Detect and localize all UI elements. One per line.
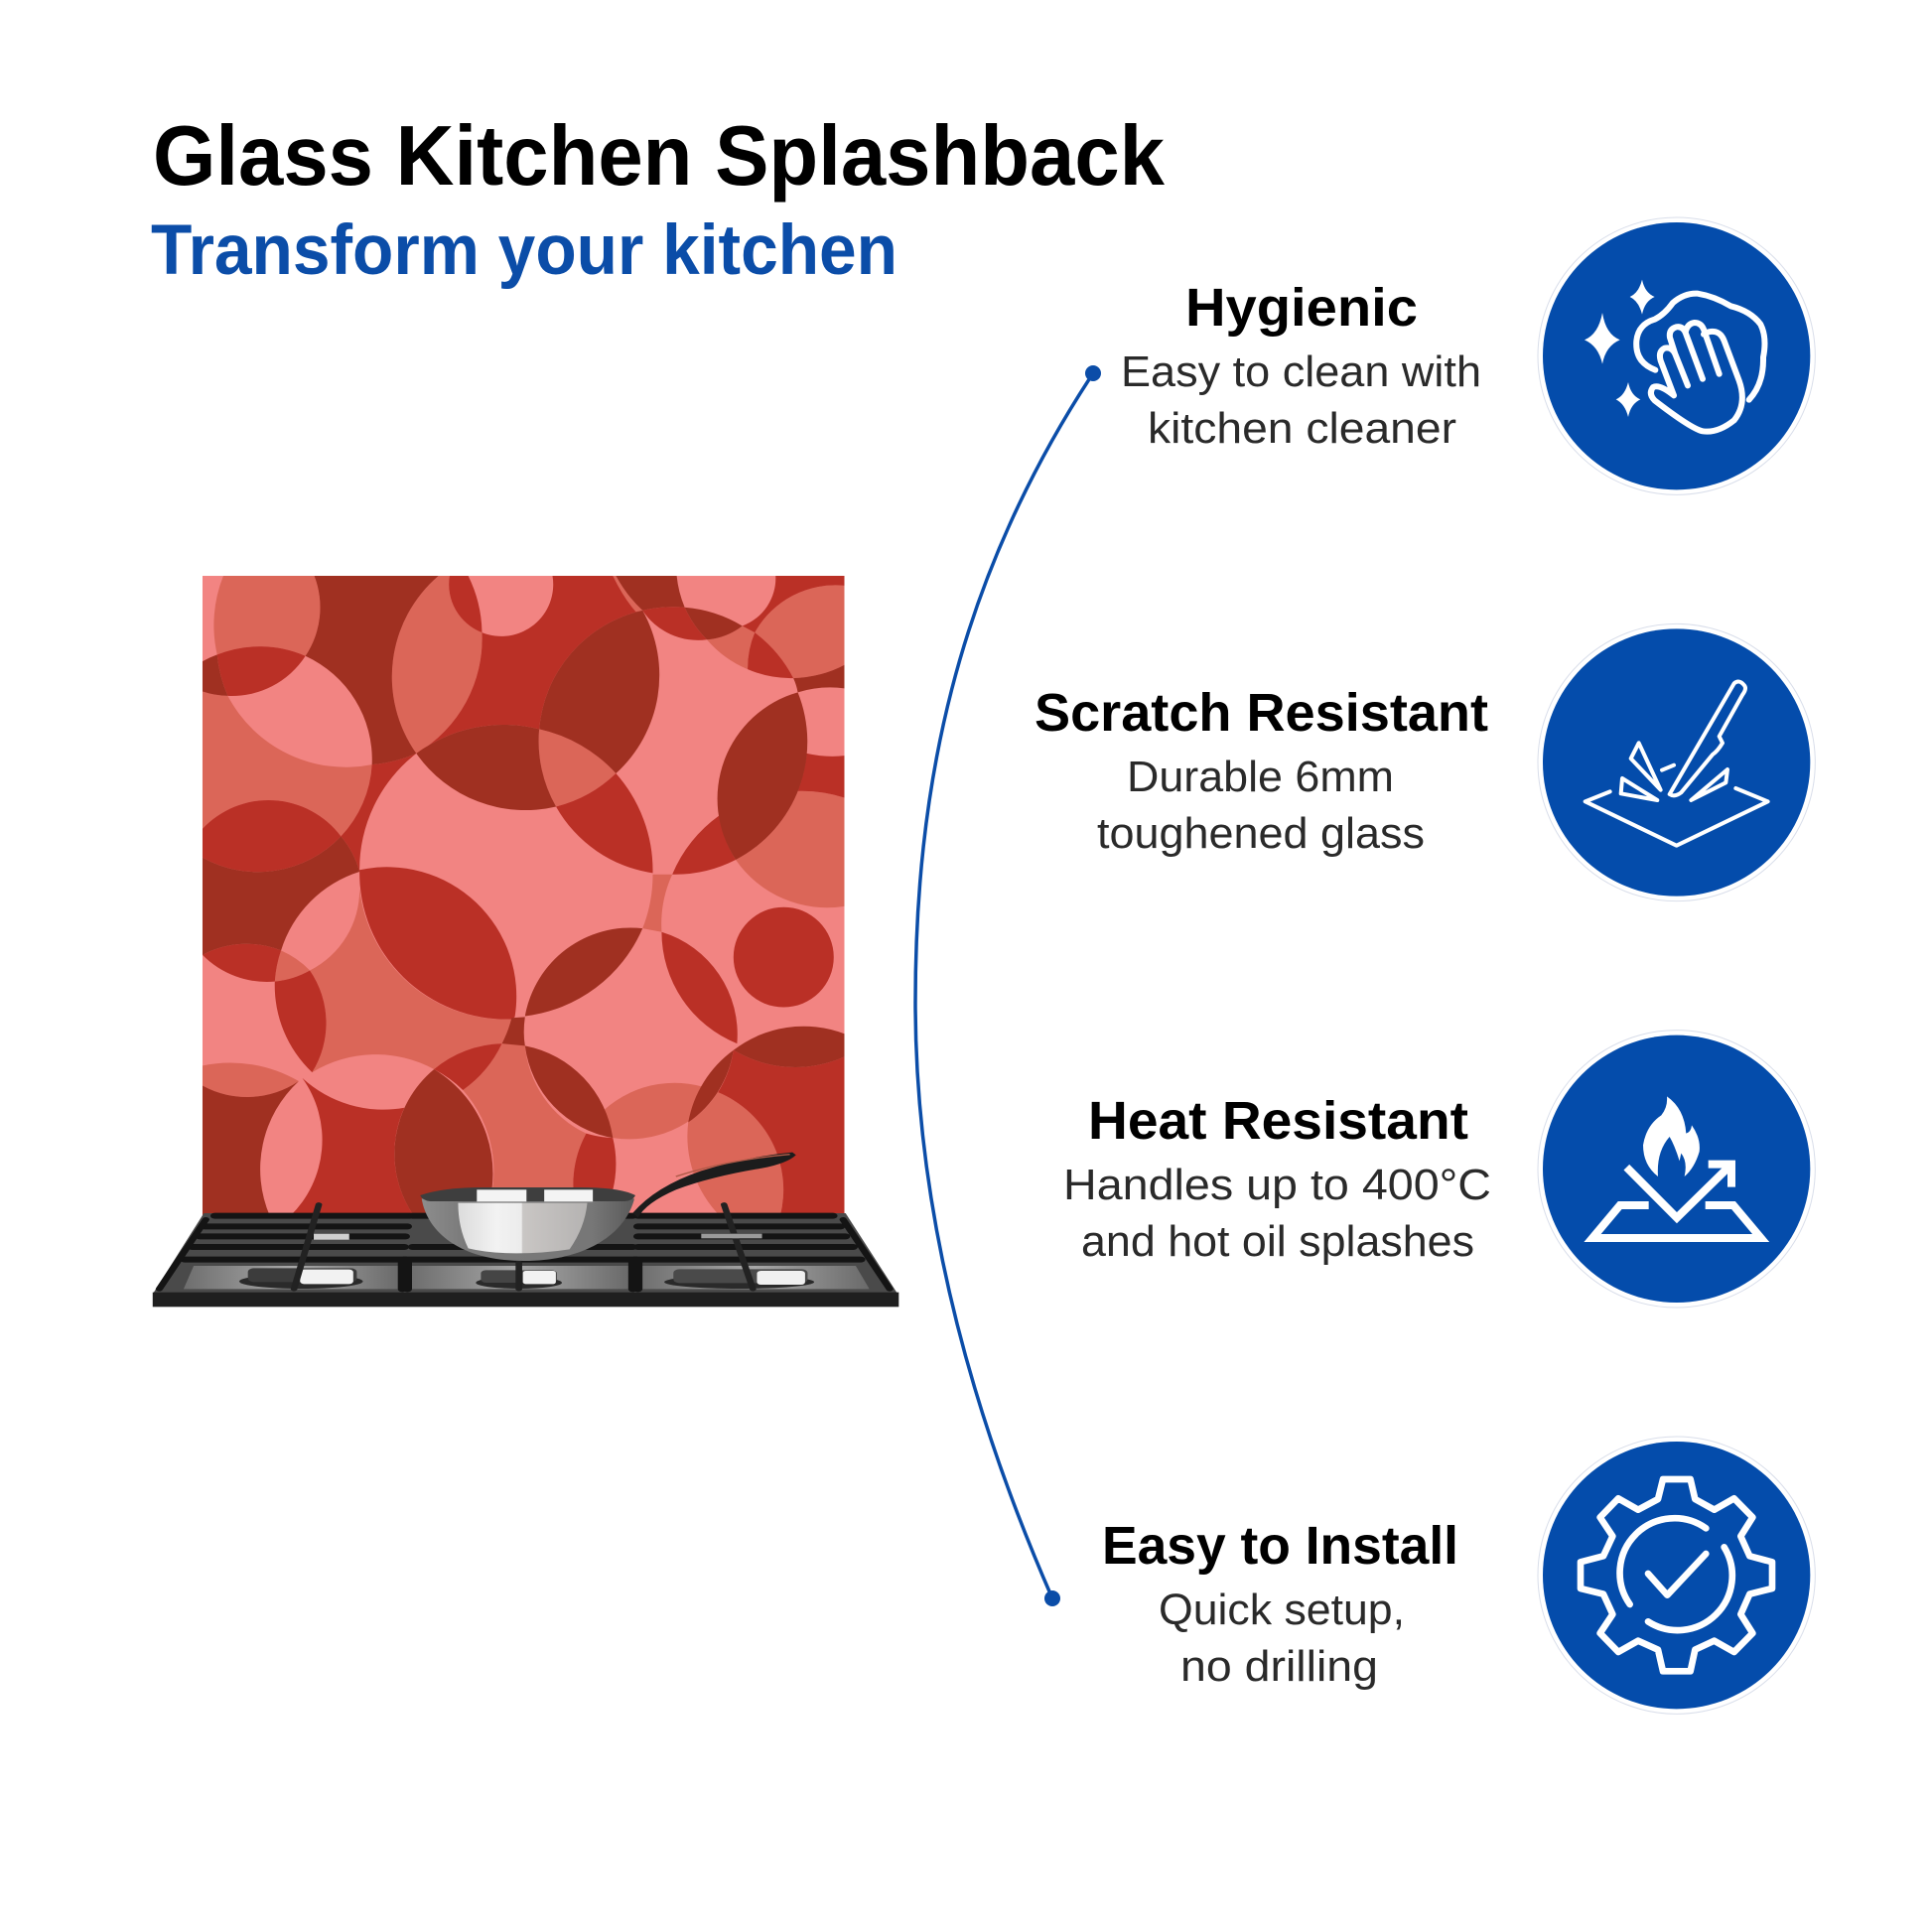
feature: easy to install text: Quick setup,	[1159, 1586, 1405, 1634]
pan rim	[420, 1187, 635, 1201]
icon: gear with check	[1538, 1437, 1815, 1714]
feature: easy to install text	[1102, 1516, 1458, 1691]
feature: hygienic text: Easy to clean with	[1121, 347, 1481, 396]
feature: scratch resistant text: Durable 6mm	[1127, 753, 1394, 801]
feature: heat resistant text: and hot oil splashes	[1081, 1217, 1474, 1266]
feature: scratch resistant text	[1035, 683, 1488, 858]
feature: hygienic text	[1121, 278, 1481, 453]
feature: hygienic text: Hygienic	[1185, 278, 1418, 338]
feature: heat resistant text	[1063, 1091, 1491, 1266]
pan shine	[458, 1203, 588, 1253]
connector curve	[915, 365, 1101, 1606]
subtitle: Transform your kitchen	[151, 211, 897, 290]
feature: heat resistant text: Heat Resistant	[1088, 1091, 1468, 1151]
icon: hand wiping	[1538, 217, 1815, 494]
grates	[159, 1204, 890, 1289]
icon: knife on glass	[1538, 623, 1815, 901]
burner wells	[184, 1266, 870, 1289]
feature: heat resistant text: Handles up to 400°C	[1063, 1161, 1491, 1209]
grate burner highlights	[314, 1234, 762, 1240]
feature: easy to install text: no drilling	[1180, 1642, 1378, 1691]
feature: scratch resistant text: Scratch Resistant	[1035, 683, 1488, 743]
burners	[239, 1268, 814, 1289]
front edge	[153, 1293, 898, 1307]
gas hob with pan	[153, 1153, 898, 1307]
feature: easy to install text: Easy to Install	[1102, 1516, 1458, 1576]
feature: scratch resistant text: toughened glass	[1097, 809, 1425, 858]
pan handle	[632, 1153, 796, 1218]
rim highlights	[477, 1189, 593, 1201]
handle highlight	[676, 1155, 790, 1176]
hob frame	[153, 1213, 897, 1294]
feature: hygienic text: kitchen cleaner	[1148, 404, 1456, 453]
icon: flame and heat reflection	[1538, 1031, 1815, 1308]
pan body	[422, 1198, 634, 1261]
panel: red circles glass splashback	[203, 576, 845, 1216]
title: Glass Kitchen Splashback	[153, 109, 1166, 204]
